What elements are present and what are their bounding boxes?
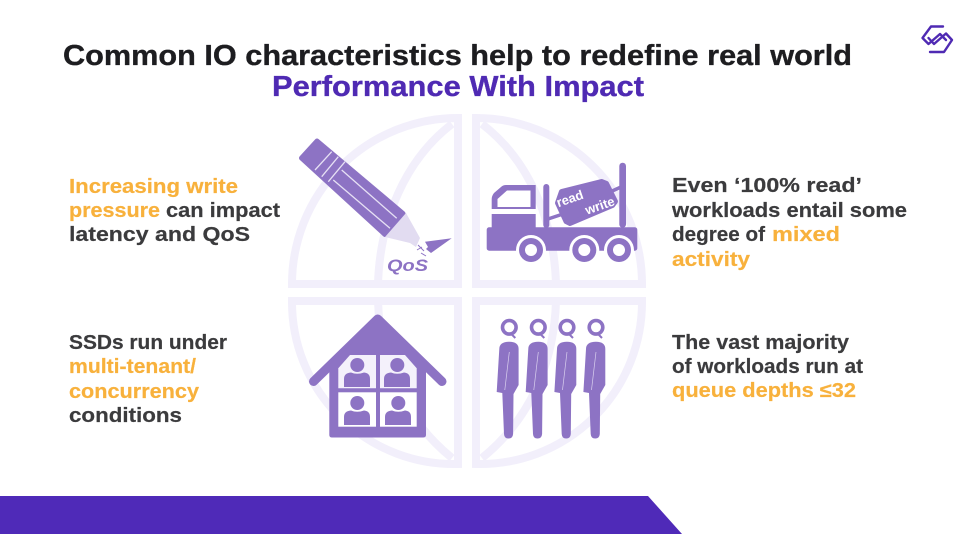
text block: queue depths: of workloads run at	[672, 356, 863, 378]
text block: queue depths	[672, 332, 863, 402]
person 3	[554, 320, 576, 438]
text block: write pressure: latency and QoS	[69, 224, 250, 246]
text block: multi-tenant: concurrency	[69, 381, 200, 403]
drum labels: read	[554, 187, 585, 210]
person 4	[583, 320, 605, 438]
text block: multi-tenant: conditions	[69, 405, 182, 427]
scribble: QoS: QoS	[387, 256, 429, 275]
wheels	[516, 235, 634, 265]
subtitle: Performance With Impact	[272, 71, 644, 103]
text block: write pressure: Increasing write	[69, 176, 238, 198]
text block: queue depths: The vast majority	[672, 332, 850, 354]
text block: multi-tenant: multi-tenant/	[69, 356, 196, 378]
person 1	[497, 320, 519, 438]
text block: mixed activity: Even ‘100% read’	[672, 175, 862, 197]
text block: write pressure: pressure	[69, 200, 160, 222]
text block: multi-tenant: SSDs run under	[69, 332, 227, 354]
text block: mixed activity: activity	[672, 249, 751, 271]
text block: mixed activity	[671, 175, 907, 271]
text block: queue depths: queue depths ≤32	[672, 380, 856, 402]
text block: mixed activity: degree of	[672, 224, 765, 246]
title: Common IO characteristics help to redefine real world	[63, 40, 852, 72]
text block: write pressure: can impact	[166, 200, 280, 222]
drum labels	[554, 187, 617, 218]
icon: company logo	[922, 26, 952, 52]
icon: house with tenants	[314, 318, 442, 438]
title	[63, 40, 852, 103]
text block: mixed activity: mixed	[772, 224, 840, 246]
text block: mixed activity: workloads entail some	[671, 200, 907, 222]
text block: write pressure	[69, 176, 280, 246]
tenants	[350, 358, 364, 372]
icon: queue of people	[497, 320, 605, 438]
drum labels: write	[582, 193, 617, 218]
text block: multi-tenant	[69, 332, 227, 427]
footer banner	[0, 496, 682, 534]
person 2	[526, 320, 548, 438]
icon: mixer truck	[487, 163, 637, 265]
globe background	[292, 118, 642, 464]
icon: pencil	[302, 141, 452, 275]
